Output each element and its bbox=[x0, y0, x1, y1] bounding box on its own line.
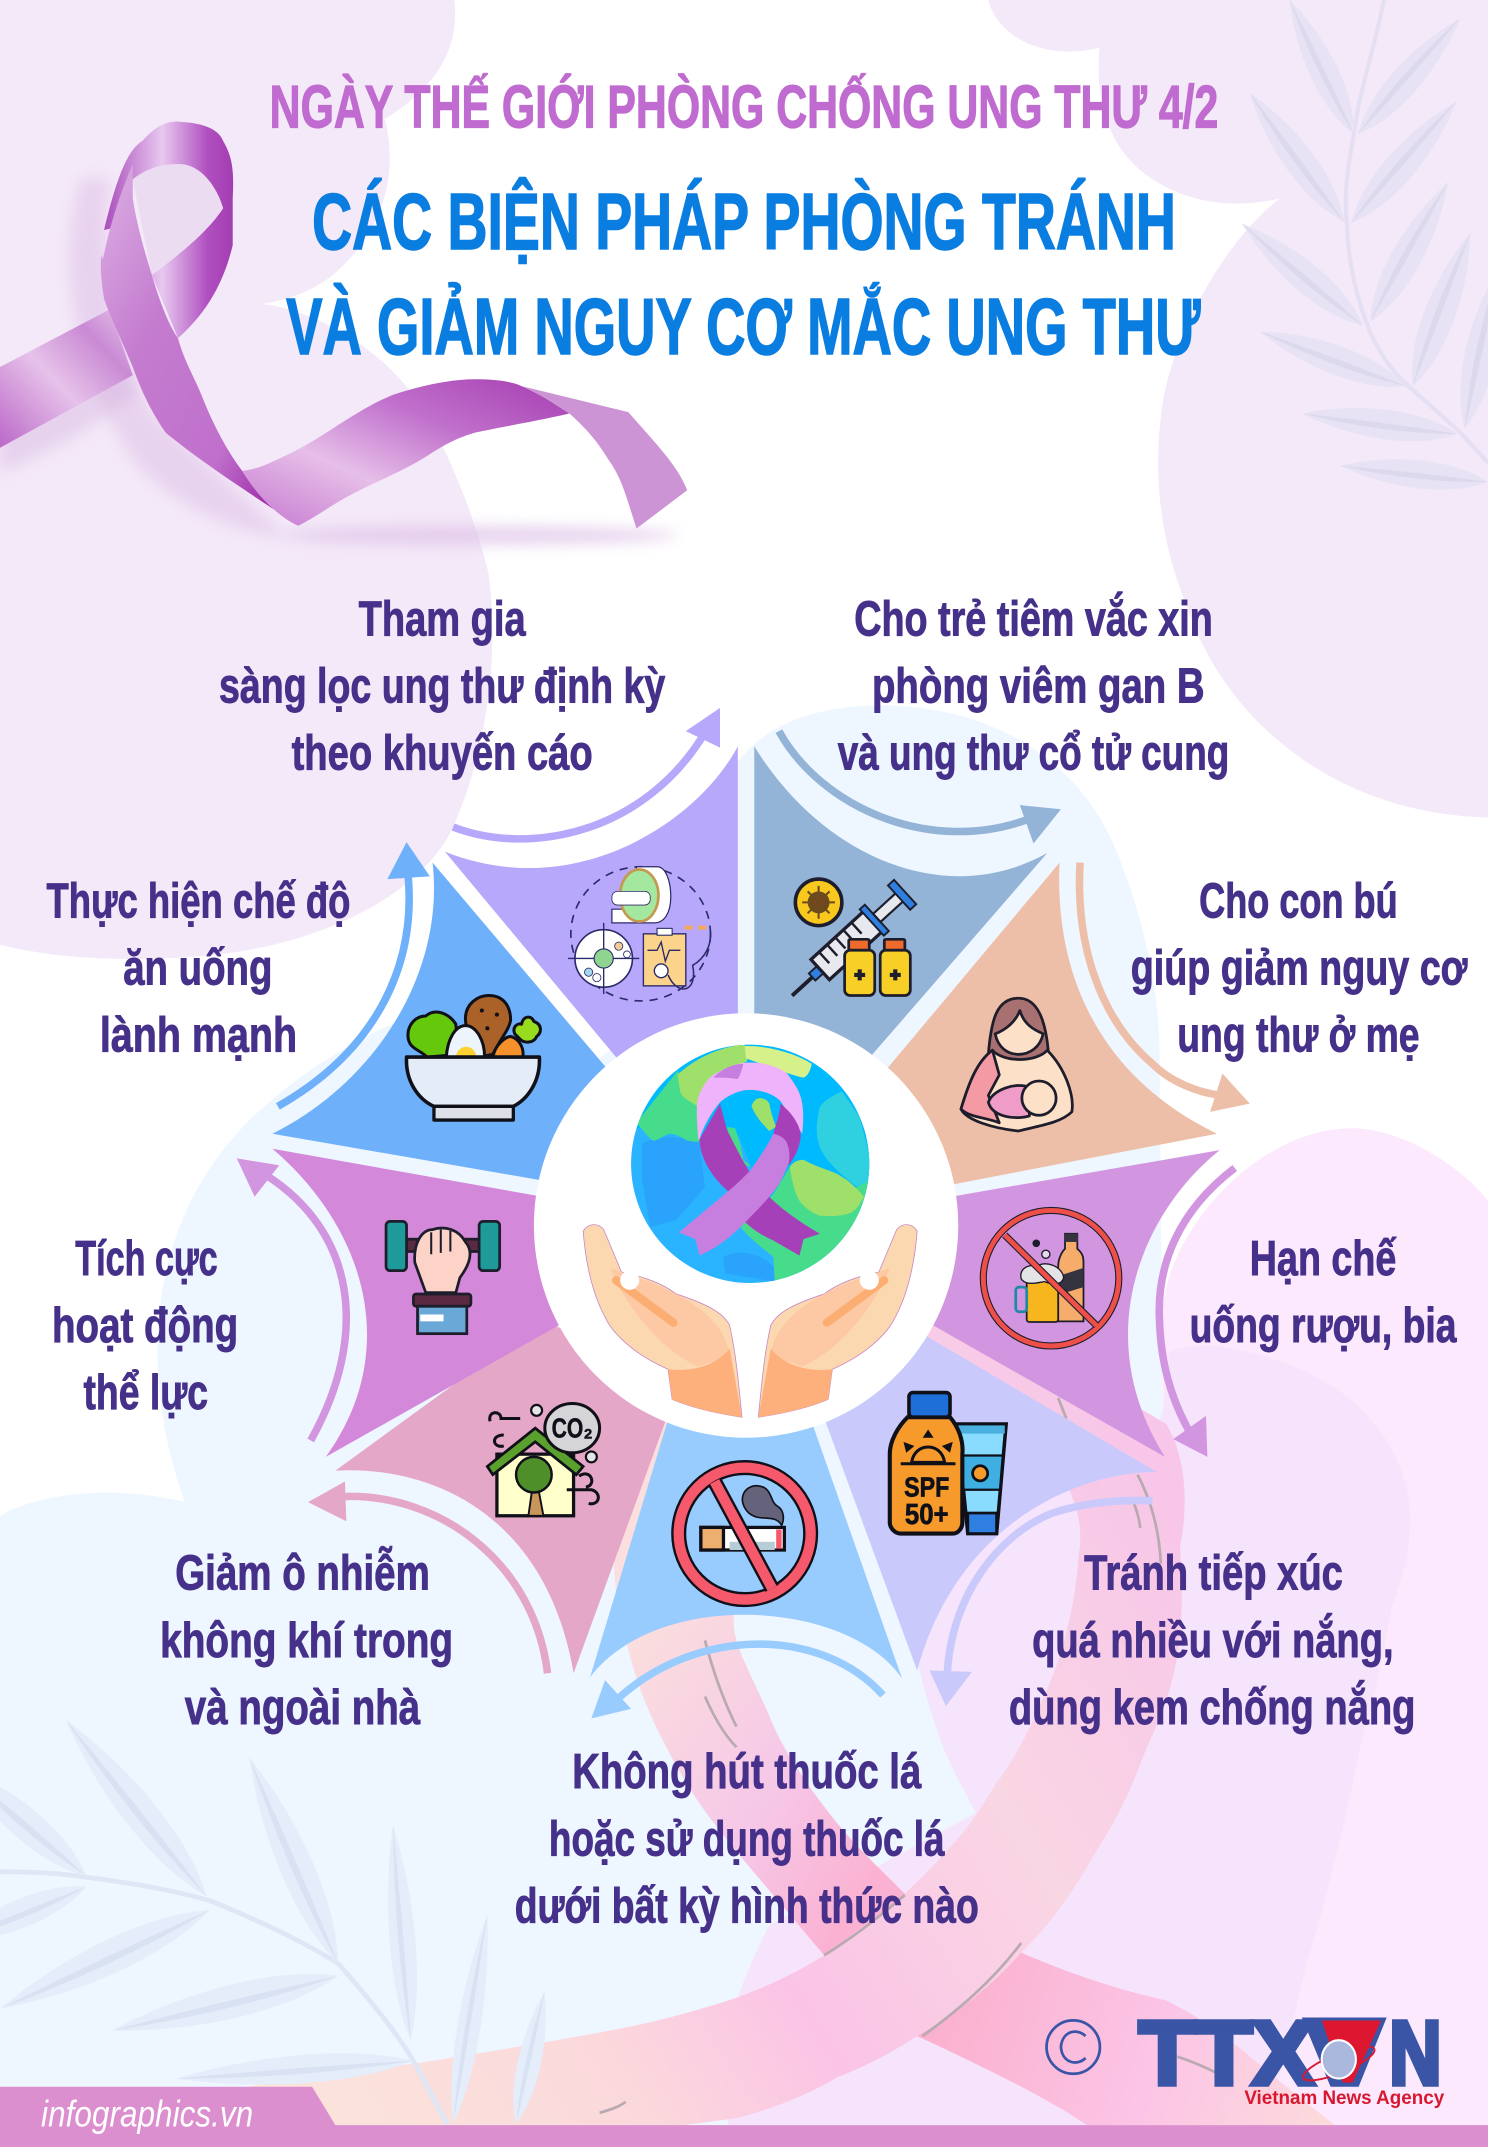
label: tobacco: Không hút thuốc lá bbox=[572, 1744, 922, 1799]
label: sun: quá nhiều với nắng, bbox=[1032, 1612, 1394, 1668]
icon: sunscreen bbox=[890, 1393, 1006, 1534]
icon: sunscreen: 50+ bbox=[905, 1499, 949, 1531]
label: breastfeeding bbox=[1131, 873, 1468, 1063]
label: healthy diet: lành mạnh bbox=[100, 1008, 297, 1063]
label: screening: Tham gia bbox=[359, 591, 526, 646]
leaves: bottom left bbox=[0, 1709, 556, 2126]
ribbon main band bbox=[101, 164, 298, 526]
label: tobacco: dưới bất kỳ hình thức nào bbox=[515, 1878, 979, 1933]
icon: vaccine syringe bbox=[780, 879, 917, 1009]
ribbon right tail bbox=[242, 379, 569, 526]
TTXVN logo: N bbox=[1389, 2003, 1441, 2104]
label: air pollution bbox=[160, 1545, 453, 1735]
icon: no smoking bbox=[679, 1468, 811, 1600]
icon: breastfeeding mother bbox=[961, 998, 1072, 1131]
label: physical activity: thể lực bbox=[84, 1365, 208, 1420]
label: sun bbox=[1009, 1546, 1415, 1735]
arrows bbox=[237, 708, 1250, 1718]
left hand bbox=[583, 1225, 742, 1417]
label: healthy diet bbox=[47, 873, 350, 1063]
TTXVN logo bbox=[1139, 2003, 1444, 2109]
label: vaccine: và ung thư cổ tử cung bbox=[838, 726, 1229, 781]
globe bbox=[631, 1044, 870, 1283]
right hand bbox=[758, 1225, 917, 1417]
icon: dumbbell bbox=[386, 1221, 500, 1334]
footer url: infographics.vn bbox=[41, 2093, 253, 2134]
ribbon fold end bbox=[522, 386, 687, 529]
label: physical activity: hoạt động bbox=[52, 1298, 238, 1353]
label: screening: theo khuyến cáo bbox=[292, 726, 593, 781]
hands bbox=[583, 1225, 917, 1417]
label: alcohol bbox=[1190, 1231, 1457, 1353]
copyright symbol bbox=[1047, 2020, 1100, 2074]
footer bar bbox=[0, 2087, 1488, 2147]
label: screening: sàng lọc ung thư định kỳ bbox=[219, 658, 666, 713]
purple awareness ribbon bbox=[0, 122, 687, 545]
globe ribbon bbox=[679, 1063, 820, 1256]
icon: clean air house: CO₂ bbox=[552, 1413, 593, 1444]
label: vaccine: Cho trẻ tiêm vắc xin bbox=[854, 590, 1213, 646]
label: tobacco bbox=[515, 1744, 979, 1933]
label: vaccine bbox=[838, 590, 1229, 781]
center white circle bbox=[534, 1013, 958, 1438]
label: breastfeeding: ung thư ở mẹ bbox=[1177, 1008, 1420, 1063]
ribbon left tail bbox=[0, 309, 133, 448]
label: healthy diet: ăn uống bbox=[123, 940, 272, 995]
label: sun: Tránh tiếp xúc bbox=[1084, 1546, 1343, 1601]
label: healthy diet: Thực hiện chế độ bbox=[47, 873, 350, 928]
label: alcohol: Hạn chế bbox=[1250, 1231, 1397, 1286]
label: physical activity bbox=[52, 1231, 238, 1420]
icon: medical screening bbox=[568, 867, 711, 1001]
TTXVN logo: TTX bbox=[1139, 2003, 1314, 2104]
icon: clean air house bbox=[487, 1403, 600, 1516]
label: vaccine: phòng viêm gan B bbox=[872, 658, 1205, 713]
title bbox=[286, 177, 1201, 371]
ribbon loop bbox=[104, 122, 233, 338]
label: physical activity: Tích cực bbox=[75, 1231, 218, 1286]
label: air pollution: và ngoài nhà bbox=[185, 1680, 421, 1735]
icon: sunscreen: SPF bbox=[904, 1472, 949, 1503]
icon: healthy food bowl bbox=[406, 995, 540, 1120]
icon: no alcohol bbox=[983, 1210, 1119, 1346]
label: tobacco: hoặc sử dụng thuốc lá bbox=[549, 1811, 945, 1866]
label: air pollution: không khí trong bbox=[160, 1613, 453, 1668]
leaves: top right bbox=[1232, 0, 1488, 496]
wheel wedges bbox=[272, 746, 1220, 1679]
big pink ribbon bbox=[246, 1287, 1335, 2125]
label: air pollution: Giảm ô nhiễm bbox=[175, 1545, 430, 1601]
TTXVN logo: Vietnam News Agency bbox=[1244, 2087, 1444, 2109]
label: screening bbox=[219, 591, 666, 781]
label: breastfeeding: Cho con bú bbox=[1199, 873, 1398, 928]
